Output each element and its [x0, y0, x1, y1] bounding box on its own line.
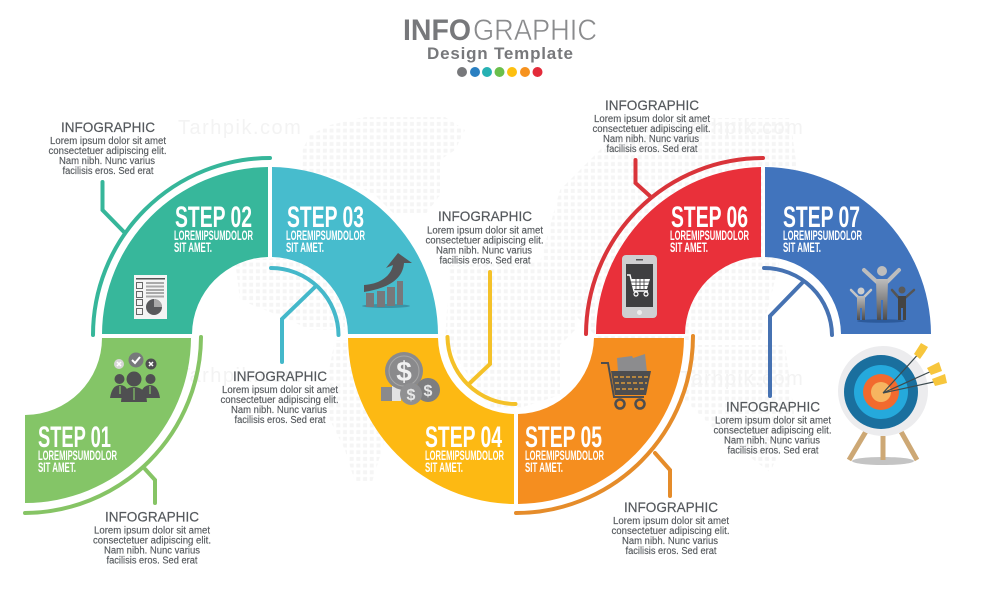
icon: coins: $: [424, 383, 433, 400]
step 6 connector: [636, 160, 651, 197]
step 3 label: SIT AMET.: [286, 240, 324, 255]
step 6 text block: Nam nibh. Nunc varius: [603, 134, 699, 145]
step 3 label: STEP 03: [287, 201, 364, 234]
step 5 label: SIT AMET.: [525, 460, 563, 475]
step 3 connector: [282, 287, 315, 362]
step 7 text block: INFOGRAPHIC: [726, 398, 820, 414]
step 2 text block: INFOGRAPHIC: [61, 119, 155, 135]
panel: step 1: [25, 337, 211, 566]
step 1 text block: [93, 508, 211, 566]
icon: team with check marks: [110, 352, 160, 402]
step 5 connector: [655, 453, 670, 496]
step 3 label: [286, 201, 365, 255]
icon: coins: [381, 352, 440, 405]
step 1 text block: Lorem ipsum dolor sit amet: [94, 526, 210, 536]
step 4 text block: Lorem ipsum dolor sit amet: [427, 226, 543, 236]
watermarks: Tarhpik.com: [680, 368, 804, 390]
panel: step 4: [348, 208, 544, 504]
step 5 text block: facilisis eros. Sed erat: [626, 546, 717, 557]
step 4 band: [348, 338, 514, 504]
step 5 outer arc: [516, 336, 693, 513]
step 3 text block: facilisis eros. Sed erat: [234, 415, 326, 426]
step 2 text block: Lorem ipsum dolor sit amet: [50, 136, 166, 147]
step 6 outer arc: [586, 158, 763, 334]
step 6 text block: consectetuer adipiscing elit.: [592, 124, 710, 135]
step 6 text block: Lorem ipsum dolor sit amet: [594, 114, 710, 125]
title: INFOGRAPHIC: [403, 14, 597, 47]
step 1 connector: [145, 469, 155, 503]
step 2 label: LOREMIPSUMDOLOR: [174, 228, 253, 243]
step 6 label: SIT AMET.: [670, 240, 708, 255]
title: INFOGRAPHIC: INFO: [403, 14, 471, 47]
step 6 text block: INFOGRAPHIC: [605, 97, 699, 113]
step 1 label: SIT AMET.: [38, 460, 76, 475]
step 3 inner arc: [271, 268, 338, 335]
title: INFOGRAPHIC: GRAPHIC: [473, 14, 597, 47]
watermarks: Tarhpik.com: [680, 117, 804, 139]
colour dots: [457, 67, 542, 77]
step 6 label: STEP 06: [671, 201, 748, 234]
step 5 text block: [612, 499, 730, 557]
step 4 label: LOREMIPSUMDOLOR: [425, 448, 504, 463]
step 5 band: [518, 338, 684, 504]
panel: step 7: [714, 167, 931, 456]
step 1 text block: consectetuer adipiscing elit.: [93, 536, 211, 546]
step 1 label: [38, 421, 117, 475]
step 5 text block: consectetuer adipiscing elit.: [612, 526, 730, 537]
step 2 band: [102, 167, 268, 334]
step 2 text block: [48, 119, 166, 177]
watermarks: Tarhpik.com: [178, 117, 302, 139]
step 5 text block: Lorem ipsum dolor sit amet: [613, 516, 729, 527]
icon: coins: $: [396, 356, 412, 387]
icon: three people cheering: [851, 266, 914, 323]
step 4 inner arc: [448, 337, 516, 404]
step 5 text block: Nam nibh. Nunc varius: [622, 536, 718, 547]
icon: coins: $: [407, 387, 416, 404]
step 7 label: SIT AMET.: [783, 240, 821, 255]
step 4 text block: consectetuer adipiscing elit.: [426, 236, 544, 246]
panel: step 5: [516, 336, 730, 557]
world map dotted background: [235, 117, 800, 482]
step 1 text block: INFOGRAPHIC: [105, 508, 199, 524]
step 1 band: [25, 338, 191, 503]
step 5 label: STEP 05: [525, 421, 602, 454]
step 1 text block: Nam nibh. Nunc varius: [104, 546, 200, 556]
step 3 band: [272, 167, 438, 334]
step 4 label: SIT AMET.: [425, 460, 463, 475]
step 7 text block: [714, 398, 832, 456]
icon: report document: [134, 275, 167, 319]
step 5 label: [525, 421, 604, 475]
step 1 label: LOREMIPSUMDOLOR: [38, 448, 117, 463]
title: [403, 14, 597, 77]
step 2 outer arc: [93, 158, 270, 335]
step 2 text block: facilisis eros. Sed erat: [62, 166, 154, 177]
step 7 band: [765, 167, 931, 334]
watermarks: [178, 117, 804, 390]
step 6 text block: [592, 97, 710, 155]
step 7 label: STEP 07: [783, 201, 860, 234]
panel: step 2: [48, 119, 270, 335]
step 5 text block: INFOGRAPHIC: [624, 499, 718, 515]
step 4 text block: [426, 208, 544, 266]
step 3 text block: INFOGRAPHIC: [233, 368, 327, 384]
icon: shopping cart: [601, 354, 651, 408]
step 1 label: STEP 01: [38, 421, 111, 454]
step 6 text block: facilisis eros. Sed erat: [606, 144, 698, 155]
step 4 text block: INFOGRAPHIC: [438, 208, 532, 224]
step 7 connector: [770, 283, 802, 396]
step 3 text block: [220, 368, 338, 426]
icon: smartphone with cart: [622, 255, 657, 318]
step 7 text block: Lorem ipsum dolor sit amet: [715, 416, 831, 426]
step 2 connector: [102, 182, 124, 232]
step 7 inner arc: [764, 268, 832, 335]
step 7 label: LOREMIPSUMDOLOR: [783, 228, 862, 243]
step 4 text block: facilisis eros. Sed erat: [440, 256, 531, 266]
panel: step 3: [220, 167, 438, 426]
step 2 text block: Nam nibh. Nunc varius: [59, 156, 155, 167]
step 2 label: STEP 02: [175, 201, 252, 234]
step 1 outer arc: [25, 337, 201, 513]
step 4 label: [425, 421, 504, 475]
step 7 text block: facilisis eros. Sed erat: [728, 446, 819, 456]
step 5 label: LOREMIPSUMDOLOR: [525, 448, 604, 463]
step 4 connector: [470, 272, 490, 383]
watermarks: Tarhpik.com: [178, 365, 302, 387]
step 3 label: LOREMIPSUMDOLOR: [286, 228, 365, 243]
step 1 text block: facilisis eros. Sed erat: [106, 556, 198, 566]
panel: step 6: [586, 97, 763, 334]
step 4 label: STEP 04: [425, 421, 502, 454]
step 2 text block: consectetuer adipiscing elit.: [48, 146, 166, 157]
step 2 label: [174, 201, 253, 255]
step 6 band: [596, 167, 761, 334]
step 6 label: [670, 201, 749, 255]
step 4 text block: Nam nibh. Nunc varius: [436, 246, 532, 256]
step 7 label: [783, 201, 862, 255]
step 7 text block: consectetuer adipiscing elit.: [714, 426, 832, 436]
step 7 text block: Nam nibh. Nunc varius: [724, 436, 820, 446]
step 3 text block: consectetuer adipiscing elit.: [220, 395, 338, 406]
step 3 text block: Nam nibh. Nunc varius: [231, 405, 327, 416]
icon: rising arrow chart: [362, 253, 412, 308]
subtitle: Design Template: [427, 44, 573, 63]
step 3 text block: Lorem ipsum dolor sit amet: [222, 385, 338, 396]
icon: target with arrows: [838, 343, 947, 465]
step 2 label: SIT AMET.: [174, 240, 212, 255]
step 6 label: LOREMIPSUMDOLOR: [670, 228, 749, 243]
